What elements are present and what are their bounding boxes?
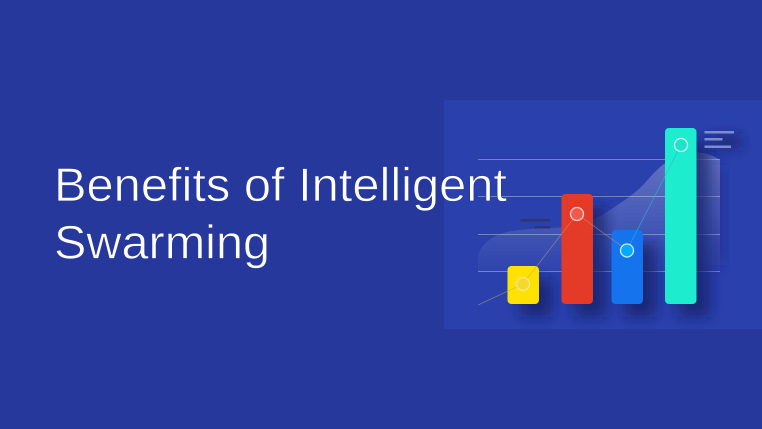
marker: blue bar [620, 244, 634, 257]
marker: teal bar [674, 138, 688, 152]
marker: yellow bar [516, 278, 530, 290]
bar shadows [520, 141, 710, 317]
title: Benefits of Intelligent [54, 158, 507, 211]
title: Swarming [54, 216, 270, 268]
panel background [444, 100, 762, 329]
bar: red [562, 194, 593, 304]
area shadow [712, 165, 726, 265]
title [54, 158, 507, 268]
trend line [478, 145, 681, 305]
bar: blue [612, 230, 643, 304]
dark legend dashes [520, 219, 550, 228]
panel: chart illustration [444, 100, 762, 329]
bar: yellow [508, 266, 539, 304]
grid lines [478, 160, 720, 272]
marker: red bar [570, 208, 584, 220]
area shape behind bars [478, 152, 720, 271]
bar: teal [665, 128, 696, 304]
light legend dashes [704, 131, 742, 150]
